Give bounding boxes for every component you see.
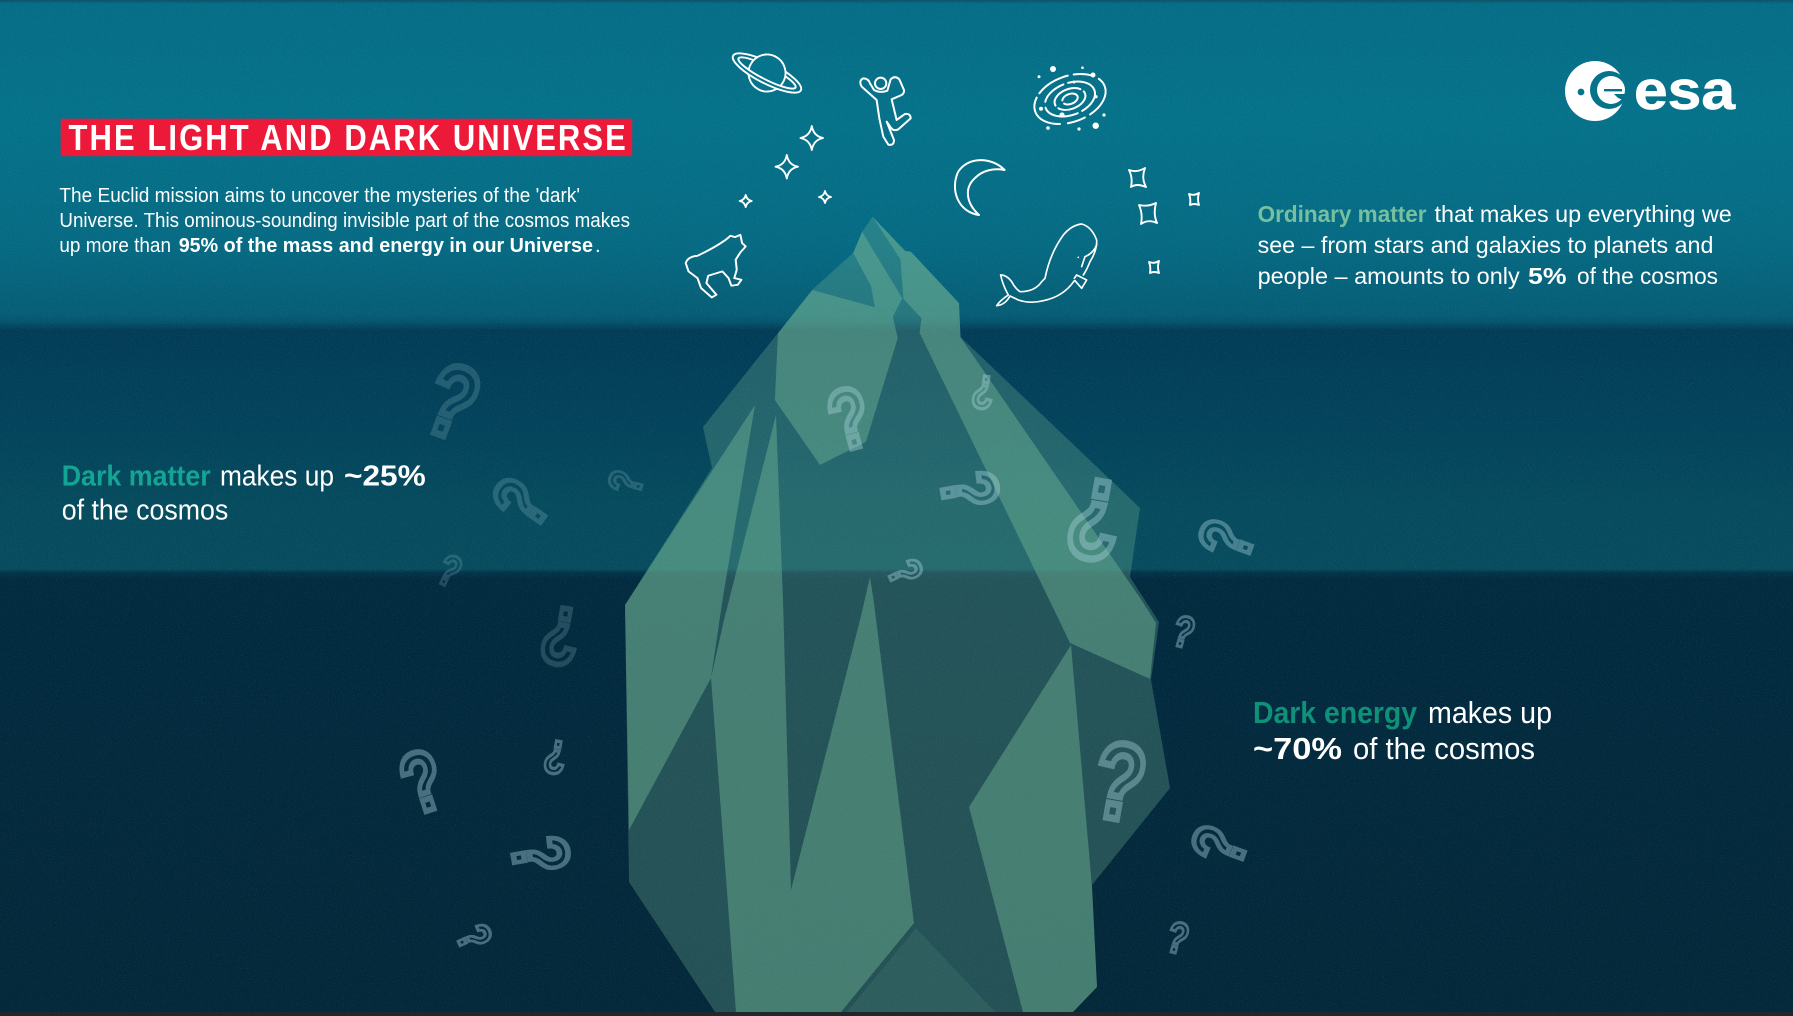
question mark: ?: [410, 341, 494, 464]
intro text block: 95% of the mass and energy in our Universe: [179, 234, 593, 257]
question mark: ?: [924, 465, 1016, 516]
dark energy text block: of the cosmos: [1353, 731, 1535, 766]
dark matter text block: makes up: [220, 461, 334, 493]
dark matter text block: Dark matter: [62, 461, 211, 493]
dark energy text block: makes up: [1428, 695, 1552, 730]
title: THE LIGHT AND DARK UNIVERSE: [68, 119, 626, 159]
intro text block: Universe. This ominous-sounding invisible part of the cosmos makes: [59, 209, 630, 232]
ordinary matter text block: 5%: [1528, 263, 1567, 289]
ordinary matter text block: see – from stars and galaxies to planets and: [1258, 232, 1713, 258]
question mark: ?: [1058, 453, 1131, 585]
iceberg facet: centre: [711, 415, 914, 1012]
icon: spiral galaxy: [1027, 65, 1113, 133]
intro text block: .: [595, 234, 601, 257]
intro text block: [59, 184, 630, 257]
icons: four-point stars: [740, 126, 1199, 273]
esa logo: esa: [1634, 59, 1735, 121]
question mark: ?: [1175, 815, 1264, 876]
icon: whale: [997, 224, 1097, 306]
dark energy text block: Dark energy: [1253, 695, 1418, 730]
ordinary matter text block: people – amounts to only: [1258, 263, 1520, 289]
icon: ringed planet: [725, 39, 809, 107]
question mark: ?: [534, 587, 587, 683]
iceberg: [625, 217, 1170, 1012]
question mark: ?: [1084, 719, 1155, 846]
ordinary matter text block: Ordinary matter: [1258, 201, 1426, 227]
question mark: ?: [1167, 607, 1200, 659]
iceberg facet: upper face: [775, 232, 902, 465]
question mark: ?: [968, 364, 998, 420]
iceberg facet: lower right: [969, 645, 1097, 1012]
iceberg facet: summit right: [872, 217, 960, 337]
esa logo: [1565, 59, 1735, 121]
dark matter text block: [62, 461, 426, 526]
bottom edge bar: [0, 1012, 1793, 1016]
iceberg facet: long right strip: [920, 318, 1156, 679]
icon: cow: [686, 235, 746, 297]
question mark: ?: [597, 465, 654, 500]
icon: galaxy stars: [1038, 66, 1106, 131]
question mark: ?: [389, 731, 456, 833]
question marks scattered through the dark universe: [389, 341, 1271, 965]
dark matter text block: of the cosmos: [62, 494, 228, 526]
question mark: ?: [430, 545, 469, 598]
iceberg facet: bottom: [847, 928, 995, 1012]
question mark: ?: [474, 463, 567, 543]
ordinary matter text block: that makes up everything we: [1434, 201, 1732, 227]
question mark: ?: [1182, 509, 1271, 570]
ordinary matter text block: [1258, 201, 1732, 289]
icon: jumping person: [860, 77, 911, 145]
question mark: ?: [877, 551, 934, 593]
dark energy text block: [1253, 695, 1552, 766]
question mark: ?: [1161, 913, 1194, 965]
intro text block: up more than: [59, 234, 171, 257]
intro text block: The Euclid mission aims to uncover the mysteries of the 'dark': [59, 184, 580, 207]
question mark: ?: [494, 830, 587, 881]
ordinary matter text block: of the cosmos: [1577, 263, 1718, 289]
question mark: ?: [818, 368, 881, 469]
question mark: ?: [540, 729, 570, 785]
dark energy text block: ~70%: [1253, 731, 1342, 766]
icon: crescent moon: [955, 160, 1005, 215]
question mark: ?: [446, 916, 503, 958]
iceberg silhouette: [625, 217, 1170, 1012]
dark matter text block: ~25%: [344, 461, 426, 493]
iceberg facet: left: [625, 405, 755, 830]
